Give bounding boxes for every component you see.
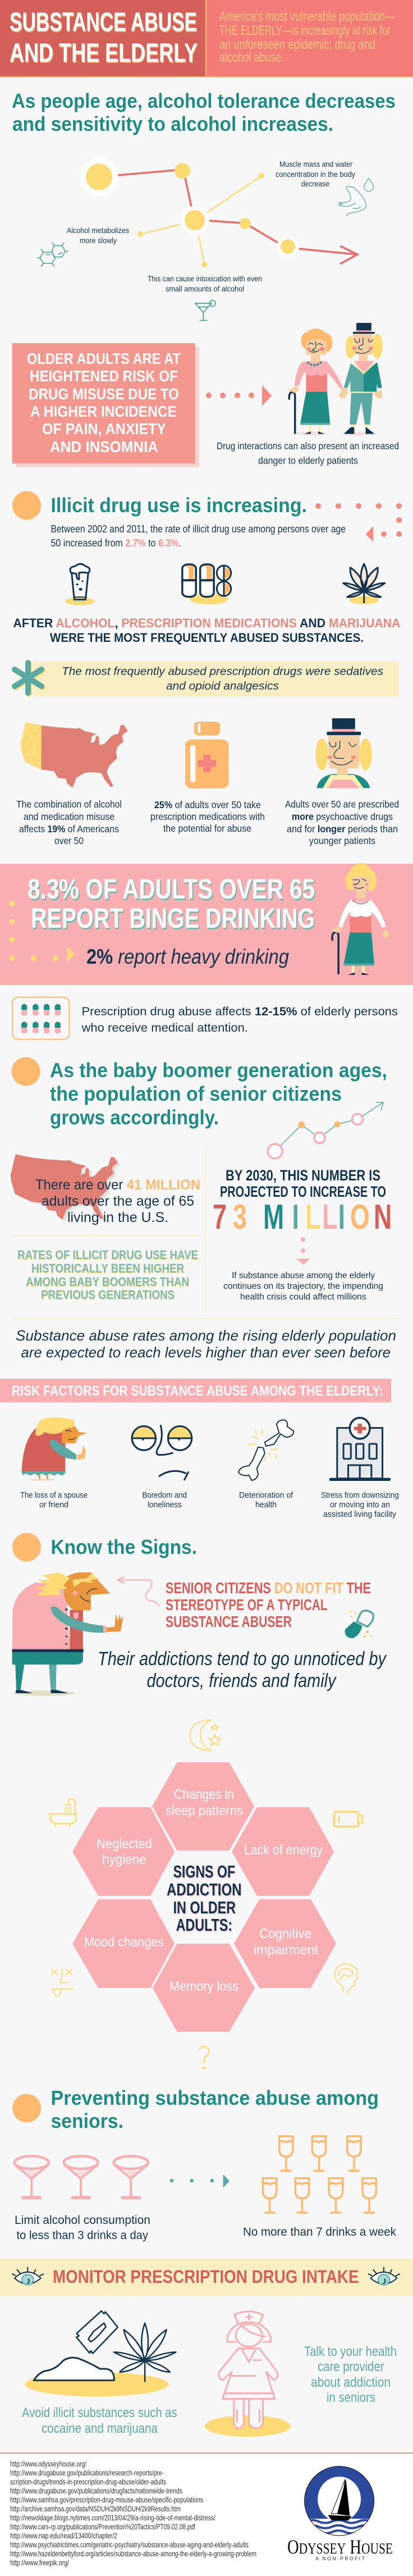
text: stereotype: SUBSTANCE ABUSER: [166, 1613, 292, 1630]
nurse feet and shadow: [205, 2409, 291, 2437]
icons: seven champagne flutes: [263, 2136, 376, 2213]
text: avoid illicit substances: [22, 2405, 177, 2436]
heading: binge drinking statistic: [27, 873, 315, 934]
text: most frequently abused substances: [13, 616, 401, 645]
icon: pill bottle: [185, 722, 228, 788]
hexagon: neglected hygiene: Neglected: [97, 1836, 152, 1852]
panel: psychoactive drugs statistic: [285, 718, 399, 846]
text: 41 million: [35, 1177, 200, 1225]
text: 41 million: There are over 41 MILLION: [35, 1177, 200, 1193]
icon: arm and water drop: [338, 178, 374, 216]
title: SUBSTANCE ABUSE: [10, 7, 197, 37]
man: [341, 323, 383, 435]
text: health crisis: health crisis could affect millions: [240, 1292, 366, 1302]
heading: illicit drug use: Illicit drug use is increasing.: [51, 494, 307, 517]
text: 12-15 percent: Prescription drug abuse affects 12-15% of elderly persons: [82, 1005, 398, 1018]
panel: older adults at heightened risk: DRUG MISUSE DUE TO: [29, 385, 179, 403]
sources list: http://archive.samhsa.gov/data/NSDUH/2k9NSDUH/2k9Results.htm: [10, 2504, 181, 2513]
panel: US map statistic: [16, 721, 131, 846]
illustration: nurse: [219, 2311, 278, 2424]
hexagon: mood changes: [72, 1899, 175, 1988]
text: avoid illicit substances: Avoid illicit substances such as: [22, 2405, 177, 2420]
big number: 73 million: M: [263, 1198, 284, 1237]
text: 25 percent: prescription medications with: [150, 811, 265, 822]
text: expected to reach higher levels: [16, 1327, 396, 1361]
title: [10, 7, 198, 67]
callout: intoxication: [148, 274, 262, 293]
panel: older adults at heightened risk: OF PAIN, ANXIETY: [42, 420, 166, 437]
text: talk to your provider: Talk to your health: [304, 2344, 397, 2359]
intro text: alcohol abuse.: [219, 50, 284, 65]
molecule diagram with arrow: [80, 158, 357, 267]
center label: signs of addiction: ADULTS:: [176, 1915, 232, 1935]
text: risk factor captions: or moving into an: [330, 1500, 390, 1510]
text: rate of illicit drug use: 50 increased from 2.7% to 6.3%.: [51, 537, 181, 549]
icon: asterisk: [15, 663, 43, 694]
text: risk factor captions: or friend: [39, 1500, 68, 1510]
hexagon: cognitive impairment: Cognitive: [259, 1926, 311, 1941]
callout: muscle mass: Muscle mass and water: [279, 159, 352, 168]
text: risk factor captions: Stress from downsizing: [321, 1490, 399, 1500]
text: stereotype: [166, 1579, 371, 1630]
arrow: yellow dotted path: [9, 901, 75, 962]
text: most frequently abused substances: WERE THE MOST FREQUENTLY ABUSED SUBSTANCES.: [50, 631, 364, 645]
hexagon: cognitive impairment: impairment: [254, 1943, 318, 1958]
illustration: cocaine, razor and leaf: [25, 2311, 176, 2396]
hexagon: lack of energy: [232, 1807, 334, 1896]
callout: sedatives and opioids: and opioid analgesics: [166, 680, 279, 692]
logo: Odyssey House: A NON-PROFIT: [315, 2556, 365, 2561]
text: more psychoactive drugs: younger patients: [309, 835, 375, 846]
center label: signs of addiction: SIGNS OF: [173, 1862, 235, 1881]
panel: older adults at heightened risk: OLDER ADULTS ARE AT: [27, 350, 181, 367]
icon: right eye: [369, 2267, 400, 2285]
sources list: scription-drugs/trends-in-prescription-drug-abuse/older-adults: [10, 2477, 166, 2486]
text: more psychoactive drugs: Adults over 50 are prescribed: [285, 799, 399, 810]
text: risk factor captions: Boredom and: [143, 1490, 187, 1500]
map: US population: [11, 1154, 121, 1221]
heading: rates of illicit drug use: PREVIOUS GENERATIONS: [41, 1288, 175, 1302]
panel: monitor prescription drug intake: MONITOR PRESCRIPTION DRUG INTAKE: [53, 2267, 359, 2287]
callout: sedatives and opioids: [15, 662, 399, 696]
text: 19 percent: and medication misuse: [24, 811, 114, 822]
text: 12-15 percent: [81, 1005, 398, 1034]
arrow: down: [296, 1237, 310, 1265]
panel: 73 million projection: [213, 1167, 392, 1302]
text: 19 percent: over 50: [54, 835, 84, 846]
text: 41 million: living in the U.S.: [67, 1210, 168, 1225]
icon: left eye: [12, 2267, 43, 2285]
text: addictions unnoticed: doctors, friends and family: [147, 1670, 337, 1692]
panel: older adults at heightened risk: A HIGHER INCIDENCE: [30, 403, 177, 420]
text: risk factor captions: The loss of a spouse: [20, 1490, 88, 1500]
intro text: [219, 9, 395, 65]
text: risk factor captions: [20, 1490, 399, 1519]
text: 19 percent: The combination of alcohol: [16, 799, 122, 810]
hexagon diagram: signs of addiction: [72, 1762, 336, 2032]
text: limit alcohol: Limit alcohol consumption: [15, 2213, 150, 2227]
heading: baby boomer generation: grows accordingly.: [50, 1106, 219, 1129]
text: expected to reach higher levels: Substance abuse rates among the rising elderly population: [16, 1327, 396, 1344]
text: 25 percent: 25% of adults over 50 take: [154, 799, 261, 810]
panel: 73 million projection: BY 2030, THIS NUMBER IS: [226, 1167, 380, 1184]
text: 25 percent: the potential for abuse: [163, 823, 251, 834]
callout: alcohol metabolizes: more slowly: [80, 236, 117, 245]
line chart: growth arrow: [268, 1102, 383, 1159]
callout: muscle mass: concentration in the body: [276, 170, 355, 179]
icon: dead face: [51, 1969, 74, 1996]
arrow: dots to couple: [206, 385, 272, 406]
icon: heading bullet: [12, 491, 41, 520]
logo: Odyssey House: [287, 2466, 393, 2561]
sources list: http://www.drugabuse.gov/publications/drugfacts/nationwide-trends: [10, 2486, 182, 2495]
center label: signs of addiction: [167, 1862, 241, 1935]
sources list: http://newoldage.blogs.nytimes.com/2013/04/29/a-rising-tide-of-mental-distress/: [10, 2513, 215, 2522]
heading: rates of illicit drug use: HISTORICALLY BEEN HIGHER: [31, 1261, 184, 1275]
panel: monitor prescription drug intake: [0, 2259, 413, 2296]
text: talk to your provider: [304, 2344, 397, 2405]
callout: intoxication: This can cause intoxication with even: [148, 274, 262, 283]
hexagon: changes in sleep patterns: [152, 1762, 254, 1850]
sources list: http://www.hazeldenbettyford.org/articles/substance-abuse-among-the-elderly-a-growing-problem: [10, 2549, 256, 2558]
panel: risk factors banner: [0, 1379, 391, 1402]
sources list: http://www.freepik.org/: [10, 2558, 69, 2567]
heading: tolerance: and sensitivity to alcohol increases.: [12, 112, 333, 135]
text: talk to your provider: care provider: [318, 2359, 384, 2374]
big number: 73 million: O: [350, 1198, 370, 1237]
heading: preventing substance abuse: Preventing substance abuse among: [51, 2086, 379, 2109]
sources list: [10, 2459, 256, 2567]
text: stereotype: SENIOR CITIZENS DO NOT FIT THE: [166, 1579, 371, 1597]
icon: hospital: [329, 1418, 391, 1481]
text: rate of illicit drug use: Between 2002 and 2011, the rate of illicit drug use among persons over age: [51, 523, 346, 535]
text: more psychoactive drugs: and for longer periods than: [287, 823, 398, 835]
heading: rates of illicit drug use: RATES OF ILLICIT DRUG USE HAVE: [17, 1248, 198, 1262]
hexagon: neglected hygiene: [72, 1807, 175, 1896]
text: 19 percent: [16, 799, 122, 846]
text: more psychoactive drugs: more psychoactive drugs: [292, 811, 393, 822]
icon: pills: [182, 564, 231, 604]
text: 25 percent: [150, 799, 265, 834]
big number: 73 million: 3: [233, 1198, 247, 1237]
hexagon: changes in sleep patterns: Changes in: [174, 1787, 234, 1802]
big number: 73 million: I: [292, 1198, 299, 1237]
caption: drug interactions: [217, 440, 399, 466]
icon: marijuana leaf: [343, 564, 385, 604]
text: most frequently abused substances: AFTER ALCOHOL, PRESCRIPTION MEDICATIONS AND MARIJUANA: [13, 616, 401, 630]
sources list: http://www.nap.edu/read/13400/chapter/2: [10, 2531, 117, 2540]
illustration: senior man gesturing: [12, 1572, 123, 1696]
text: addictions unnoticed: [98, 1648, 387, 1692]
icons: beer, pills, marijuana: [65, 564, 385, 605]
big number: 73 million: I: [338, 1198, 345, 1237]
heading: rates of illicit drug use: [17, 1248, 198, 1302]
text: avoid illicit substances: cocaine and marijuana: [42, 2421, 158, 2436]
header banner: [0, 0, 413, 77]
icons: risk factors: [21, 1417, 391, 1481]
heading: binge drinking statistic: REPORT BINGE DRINKING: [31, 902, 315, 934]
hexagon: mood changes: Mood changes: [84, 1935, 164, 1950]
text: 19 percent: affects 19% of Americans: [19, 823, 119, 835]
icon: heading bullet: [12, 1533, 41, 1561]
icon: question mark: [200, 2046, 209, 2069]
sources list: http://www.samhsa.gov/prescription-drug-misuse-abuse/specific-populations: [10, 2495, 203, 2504]
text: health crisis: [223, 1271, 383, 1302]
big number: 73 million: N: [374, 1198, 392, 1237]
heading: know the signs: Know the Signs.: [51, 1535, 197, 1558]
icon: broken bone: [238, 1420, 293, 1480]
text: more psychoactive drugs: [285, 799, 399, 846]
text: health crisis: continues on its trajectory, the impending: [223, 1282, 383, 1291]
text: talk to your provider: about addiction: [311, 2375, 391, 2390]
center label: signs of addiction: ADDICTION: [167, 1880, 241, 1899]
icon: benzene molecule: [38, 243, 68, 266]
text: expected to reach higher levels: are expected to reach levels higher than ever seen before: [21, 1344, 391, 1361]
text: limit alcohol: [15, 2213, 150, 2242]
arrow: pink squiggle: [117, 1577, 159, 1606]
text: risk factor captions: health: [255, 1500, 277, 1510]
text: heavy drinking: 2% report heavy drinking: [86, 945, 289, 968]
hexagon: memory loss: Memory loss: [169, 1979, 238, 1994]
panel: prescription drug abuse: [12, 997, 398, 1039]
big number: 73 million: L: [322, 1198, 337, 1237]
panel: older adults at heightened risk: AND INSOMNIA: [50, 438, 158, 455]
title: AND THE ELDERLY: [10, 38, 198, 67]
icon: bereaved woman: [21, 1417, 87, 1481]
text: seven drinks: No more than 7 drinks a week: [243, 2225, 396, 2238]
footer: [0, 2452, 413, 2576]
hexagon: cognitive impairment: [234, 1899, 336, 1988]
icon: heading bullet: [11, 1057, 40, 1086]
callout: alcohol metabolizes: Alcohol metabolizes: [67, 226, 129, 235]
text: risk factor captions: Deterioration of: [239, 1490, 293, 1500]
center label: signs of addiction: IN OLDER: [173, 1898, 236, 1917]
caption: drug interactions: danger to elderly patients: [258, 455, 358, 466]
heading: preventing substance abuse: seniors.: [51, 2109, 123, 2132]
heading: tolerance: [12, 89, 396, 135]
sources list: http://www.psychiatrictimes.com/geriatric-psychiatry/substance-abuse-aging-and-elderly-adults: [10, 2540, 249, 2549]
big number: 73 million: L: [305, 1198, 320, 1237]
heading: baby boomer generation: [50, 1059, 387, 1129]
icon: broken capsule: [345, 1611, 373, 1638]
heading: binge drinking statistic: 8.3% OF ADULTS OVER 65: [27, 873, 315, 905]
hexagon: lack of energy: Lack of energy: [244, 1843, 323, 1858]
callout: alcohol metabolizes: [67, 226, 129, 245]
big number: 73 million: 7: [213, 1198, 227, 1237]
text: 41 million: adults over the age of 65: [42, 1193, 194, 1209]
text: risk factor captions: loneliness: [148, 1500, 182, 1510]
map: US 19 percent: [19, 721, 131, 790]
callout: muscle mass: decrease: [301, 179, 329, 188]
icon: heading bullet: [12, 2094, 41, 2123]
heading: baby boomer generation: the population of senior citizens: [50, 1082, 342, 1105]
icon: low battery: [334, 1812, 362, 1827]
icon: brain head: [334, 1964, 358, 1994]
text: stereotype: STEREOTYPE OF A TYPICAL: [166, 1596, 328, 1613]
hexagon: memory loss: [153, 1944, 255, 2032]
text: rate of illicit drug use: [51, 523, 346, 549]
icon: beer: [65, 564, 95, 605]
panel: older adults at heightened risk: [12, 343, 199, 467]
icon: martini: [195, 300, 215, 321]
text: risk factor captions: assisted living facility: [323, 1510, 396, 1519]
hexagon: neglected hygiene: hygiene: [102, 1852, 146, 1867]
text: limit alcohol: to less than 3 drinks a day: [17, 2228, 148, 2242]
illustration: woman with cane: [332, 863, 389, 975]
panel: pill bottle statistic: [150, 722, 265, 834]
arrow: dotted path: [315, 503, 402, 542]
heading: rates of illicit drug use: AMONG BABY BOOMERS THAN: [26, 1275, 189, 1289]
text: health crisis: If substance abuse among the elderly: [232, 1271, 375, 1280]
panel: 41 million adults: [11, 1154, 200, 1225]
sources list: http://www.drugabuse.gov/publications/research-reports/pre-: [10, 2468, 164, 2477]
woman: [288, 329, 346, 435]
text: 12-15 percent: who receive medical attention.: [81, 1022, 248, 1034]
sources list: http://www.cars-rp.org/publications/Prevention%20Tactics/PT09.02.08.pdf: [10, 2522, 195, 2531]
hexagon: changes in sleep patterns: sleep patterns: [166, 1803, 243, 1818]
callout: sedatives and opioids: The most frequently abused prescription drugs were sedatives: [62, 665, 383, 678]
heading: baby boomer generation: As the baby boomer generation ages,: [50, 1059, 387, 1082]
callout: muscle mass: [276, 159, 355, 188]
icons: three cocktails: [15, 2156, 148, 2197]
icon: bored face: [130, 1425, 194, 1480]
icon: bathtub: [49, 1799, 77, 1826]
sources list: http://www.odysseyhouse.org/: [10, 2459, 86, 2468]
icon: capsules box: [12, 997, 69, 1039]
text: talk to your provider: in seniors: [327, 2390, 375, 2405]
callout: intoxication: small amounts of alcohol: [166, 284, 244, 293]
illustration: elderly couple: [288, 323, 383, 435]
arrow: teal dots: [170, 2174, 230, 2188]
heading: preventing substance abuse: [51, 2086, 379, 2132]
panel: older adults at heightened risk: HEIGHTENED RISK OF: [30, 367, 178, 385]
logo: Odyssey House: ODYSSEY HOUSE: [287, 2536, 393, 2558]
illustration: man portrait: [315, 718, 372, 788]
icon: moon and stars: [190, 1720, 221, 1750]
panel: binge drinking: [0, 863, 413, 985]
